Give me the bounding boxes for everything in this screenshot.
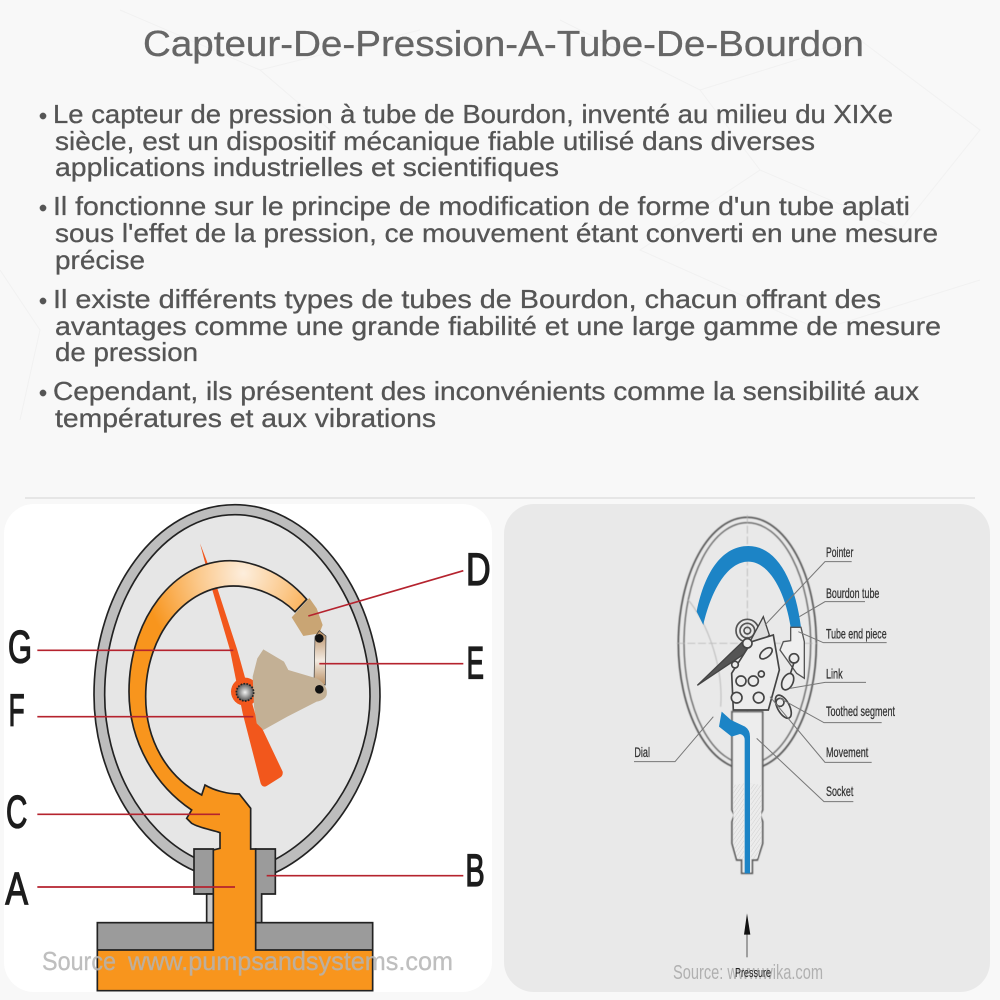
tube end piece [292, 598, 323, 636]
bullet 1: siècle, est un dispositif mécanique fiable utilisé dans diverses [55, 126, 815, 156]
socket hatching [733, 783, 761, 859]
bullet 3: Il existe différents types de tubes de Bourdon, chacun offrant des [53, 284, 881, 314]
link [314, 631, 326, 685]
bullet 1 [40, 99, 893, 182]
bourdon tube and inlet [97, 561, 373, 991]
movement plate [731, 635, 779, 710]
bullet 3: avantages comme une grande fiabilité et une large gamme de mesure [55, 311, 941, 341]
bullet 3: de pression [55, 337, 198, 367]
title: Capteur-De-Pression-A-Tube-De-Bourdon [143, 23, 864, 64]
hairspring [736, 619, 759, 642]
callout labels: Socket [826, 783, 853, 799]
blue inlet tube [719, 712, 750, 873]
part letters: A [5, 863, 28, 914]
part letters: D [466, 544, 491, 595]
pressure label: Pressure [735, 965, 771, 980]
pressure arrow [744, 913, 750, 957]
bullet 4 [40, 376, 919, 433]
dial outline [677, 515, 817, 790]
part letters: E [467, 637, 484, 688]
pointer [200, 543, 283, 787]
label lines [37, 571, 463, 887]
tube end piece [780, 627, 804, 678]
bullet 1: Le capteur de pression à tube de Bourdon, inventé au milieu du XIXe [53, 99, 893, 129]
source credit right: Source: www.wika.com [673, 962, 823, 984]
callout labels [634, 544, 895, 799]
callout labels: Dial [634, 744, 650, 760]
leader lines [634, 562, 887, 802]
bullet 2 [40, 191, 938, 275]
panel: labelled gauge cross-section [504, 504, 990, 992]
part letters: B [465, 845, 485, 896]
bullet 2: Il fonctionne sur le principe de modification de forme d'un tube aplati [53, 191, 910, 221]
part letters: C [6, 787, 27, 838]
panel: labelled gauge diagram [4, 504, 492, 992]
callout labels: Toothed segment [826, 703, 895, 719]
source credit left: Source [42, 946, 116, 976]
pinion hub [236, 684, 254, 701]
bullet 3 [40, 284, 941, 367]
part letters: G [8, 621, 32, 672]
pointer hand [697, 617, 769, 685]
gauge case [94, 505, 380, 873]
socket [732, 712, 763, 873]
bullet list [40, 99, 941, 433]
callout labels: Tube end piece [826, 625, 887, 641]
callout labels: Movement [826, 744, 868, 760]
bullet 2: précise [55, 245, 145, 275]
callout labels: Pointer [826, 544, 854, 560]
source credit left: www.pumpsandsystems.com [127, 946, 453, 976]
toothed segment [253, 649, 327, 730]
part letters: F [9, 685, 25, 736]
bullet 1: applications industrielles et scientifiques [55, 152, 559, 182]
bullet 2: sous l'effet de la pression, ce mouvement étant converti en une mesure [55, 218, 938, 248]
callout labels: Link [826, 665, 843, 681]
part letters [5, 544, 491, 914]
blue bourdon tube [697, 546, 801, 627]
base plate [97, 923, 373, 951]
bullet 4: températures et aux vibrations [55, 403, 436, 433]
socket collar [194, 849, 275, 923]
callout labels: Bourdon tube [826, 585, 879, 601]
bullet 4: Cependant, ils présentent des inconvénients comme la sensibilité aux [53, 376, 919, 406]
link and segment [772, 654, 799, 721]
